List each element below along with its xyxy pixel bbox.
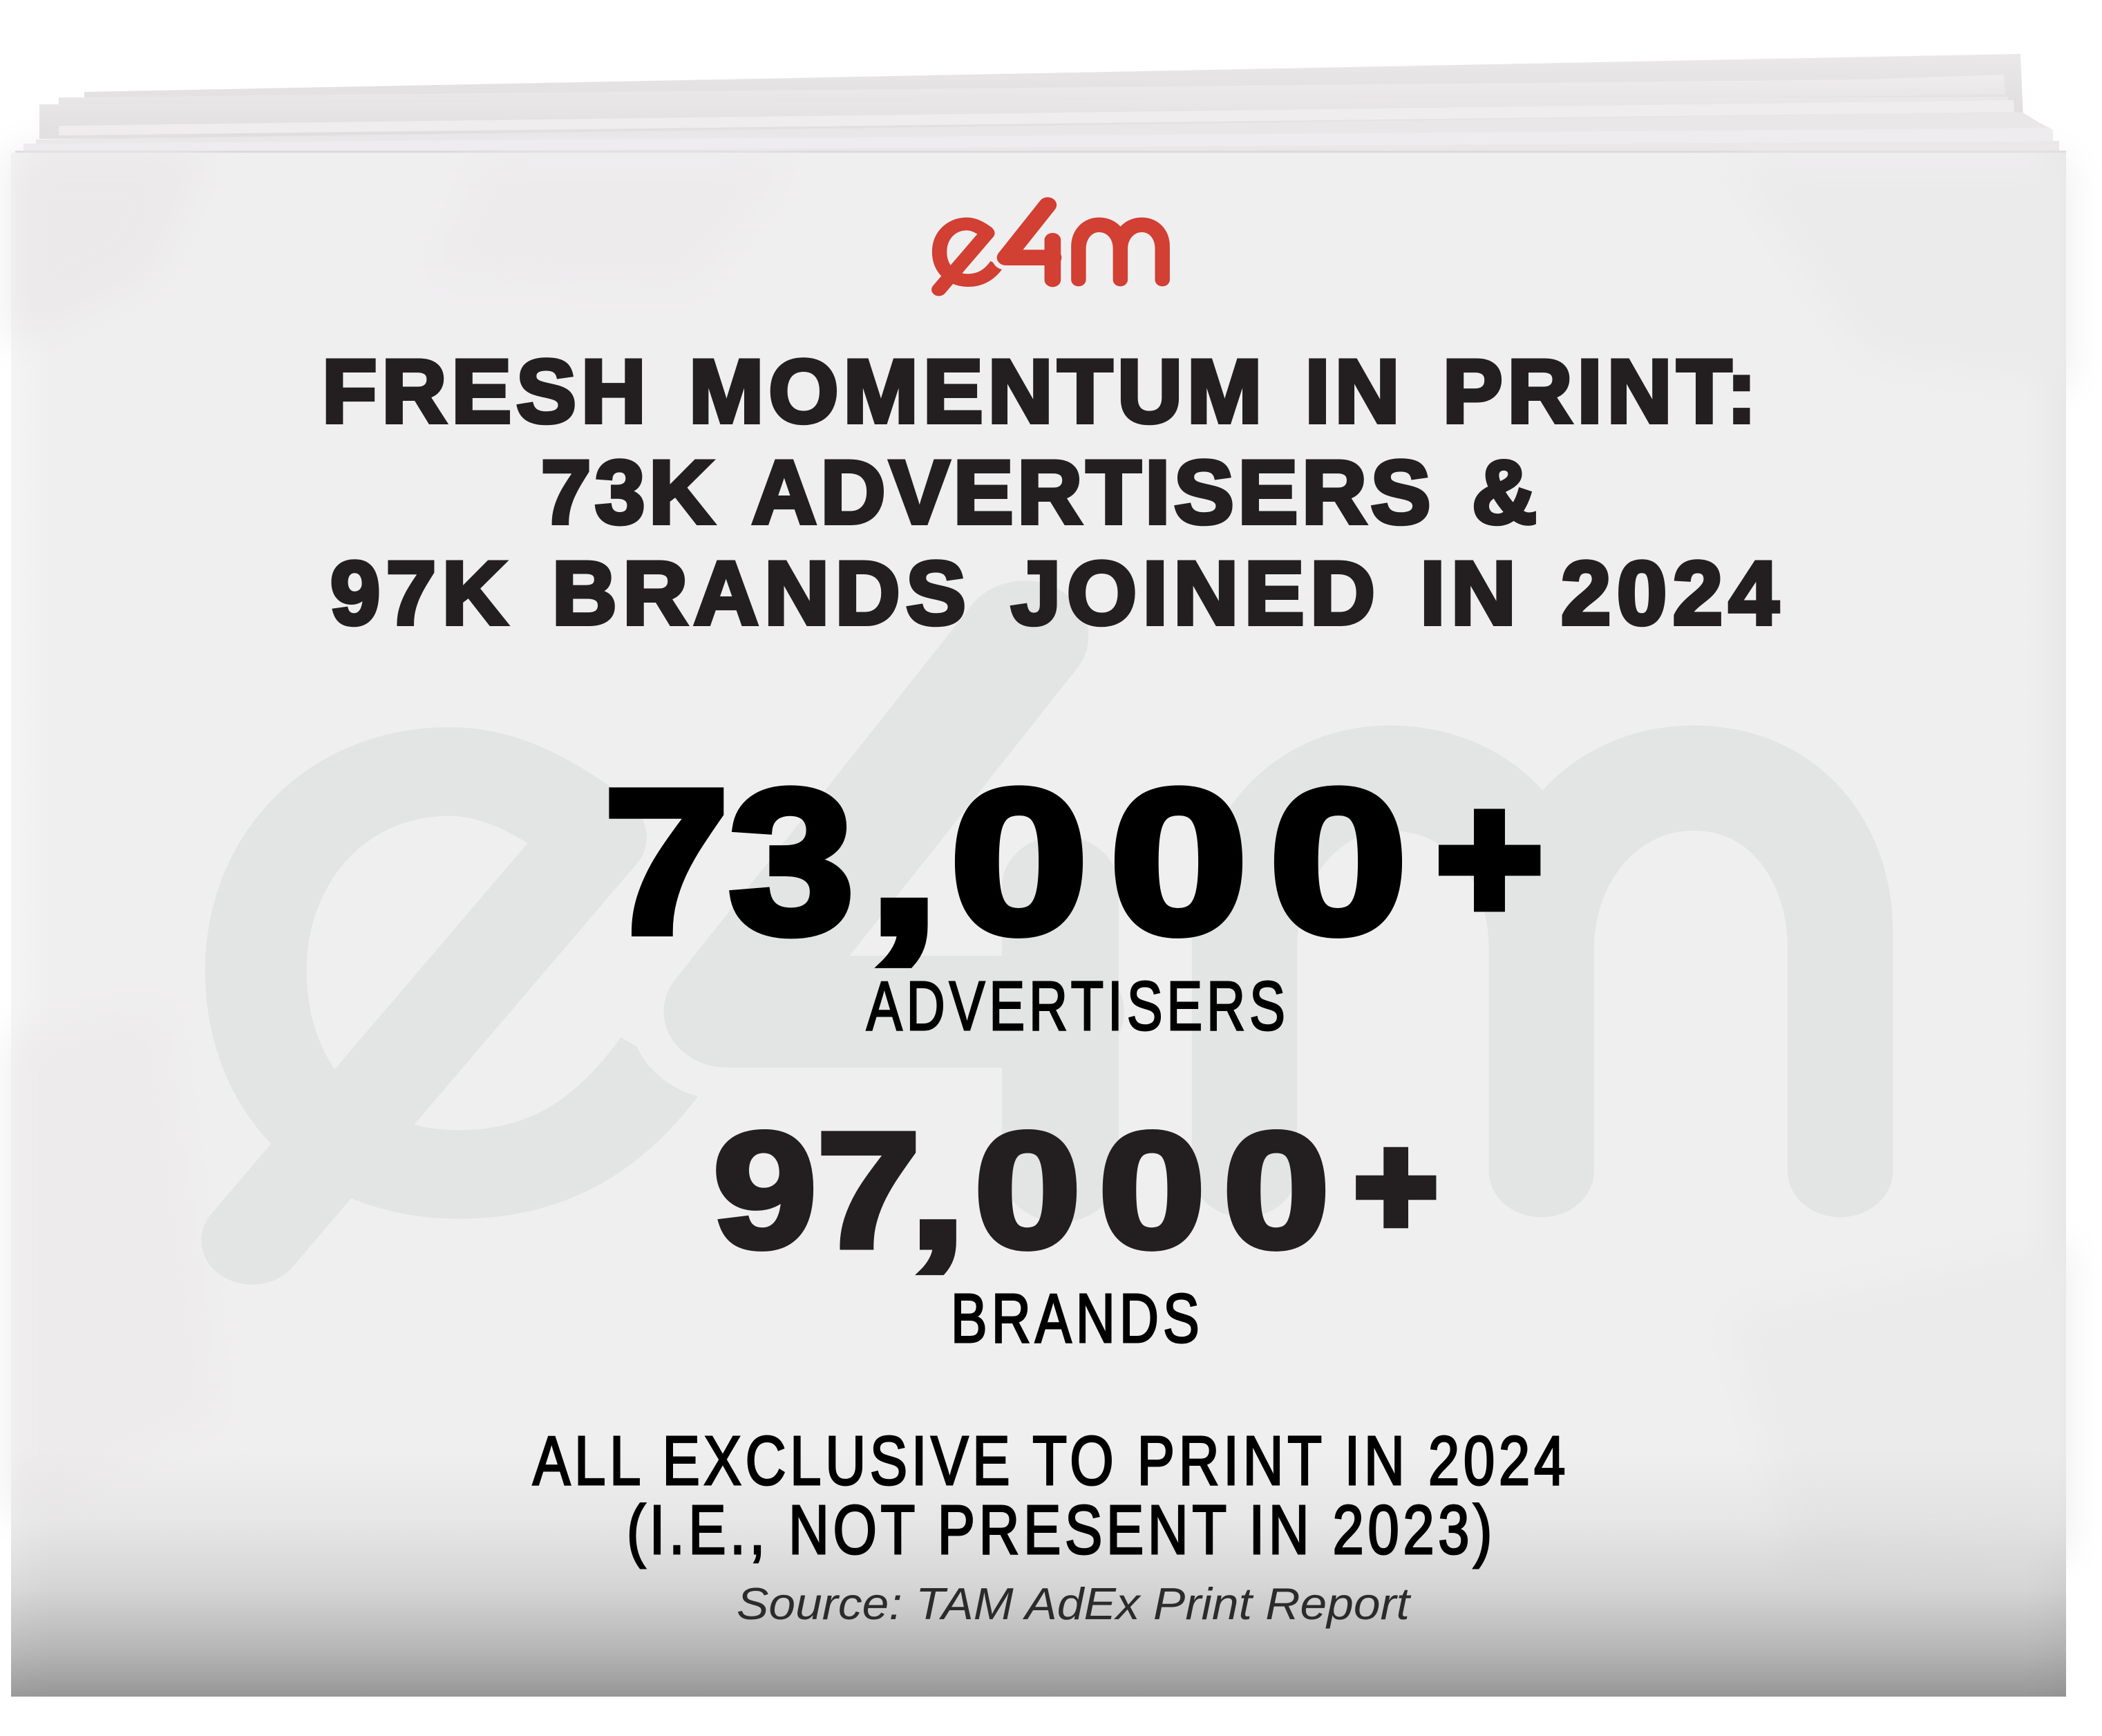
title: FRESH MOMENTUM IN PRINT: xyxy=(322,341,1757,442)
watermark logo e4m xyxy=(252,636,1840,1240)
stat: 97,000+: 97 xyxy=(713,1099,920,1282)
watermark letter m xyxy=(1244,771,1840,1171)
title: 97K BRANDS JOINED IN 2024 xyxy=(330,542,1779,643)
stat: 97,000+: , xyxy=(909,1099,966,1282)
logo letter e xyxy=(939,224,997,290)
watermark letter 4 xyxy=(728,636,1060,1171)
note: exclusive to print: ALL EXCLUSIVE TO PRINT IN 2024 xyxy=(533,1422,1569,1500)
label: brands: BRANDS xyxy=(951,1280,1204,1357)
note: exclusive to print: (I.E., NOT PRESENT IN 2023) xyxy=(627,1491,1496,1569)
stat: 97,000+: + xyxy=(1354,1106,1437,1265)
title xyxy=(322,341,1779,643)
logo letter 4 xyxy=(1006,205,1052,280)
newspaper back pages xyxy=(15,54,2066,153)
stat: 73,000+: 73 xyxy=(604,747,854,976)
label: advertisers: ADVERTISERS xyxy=(867,968,1289,1045)
logo e4m xyxy=(939,205,1162,290)
watermark letter e xyxy=(252,771,663,1240)
logo letter m xyxy=(1079,224,1162,280)
stat: 73,000+: + xyxy=(1437,757,1542,959)
stat: 73,000+: 000 xyxy=(950,747,1429,976)
stat: 97,000+: 000 xyxy=(974,1099,1347,1282)
title: 73K ADVERTISERS & xyxy=(541,442,1537,542)
stat: 73,000+: , xyxy=(868,747,940,976)
source note: Source: TAM AdEx Print Report xyxy=(737,1578,1412,1629)
note: exclusive to print xyxy=(533,1422,1569,1569)
